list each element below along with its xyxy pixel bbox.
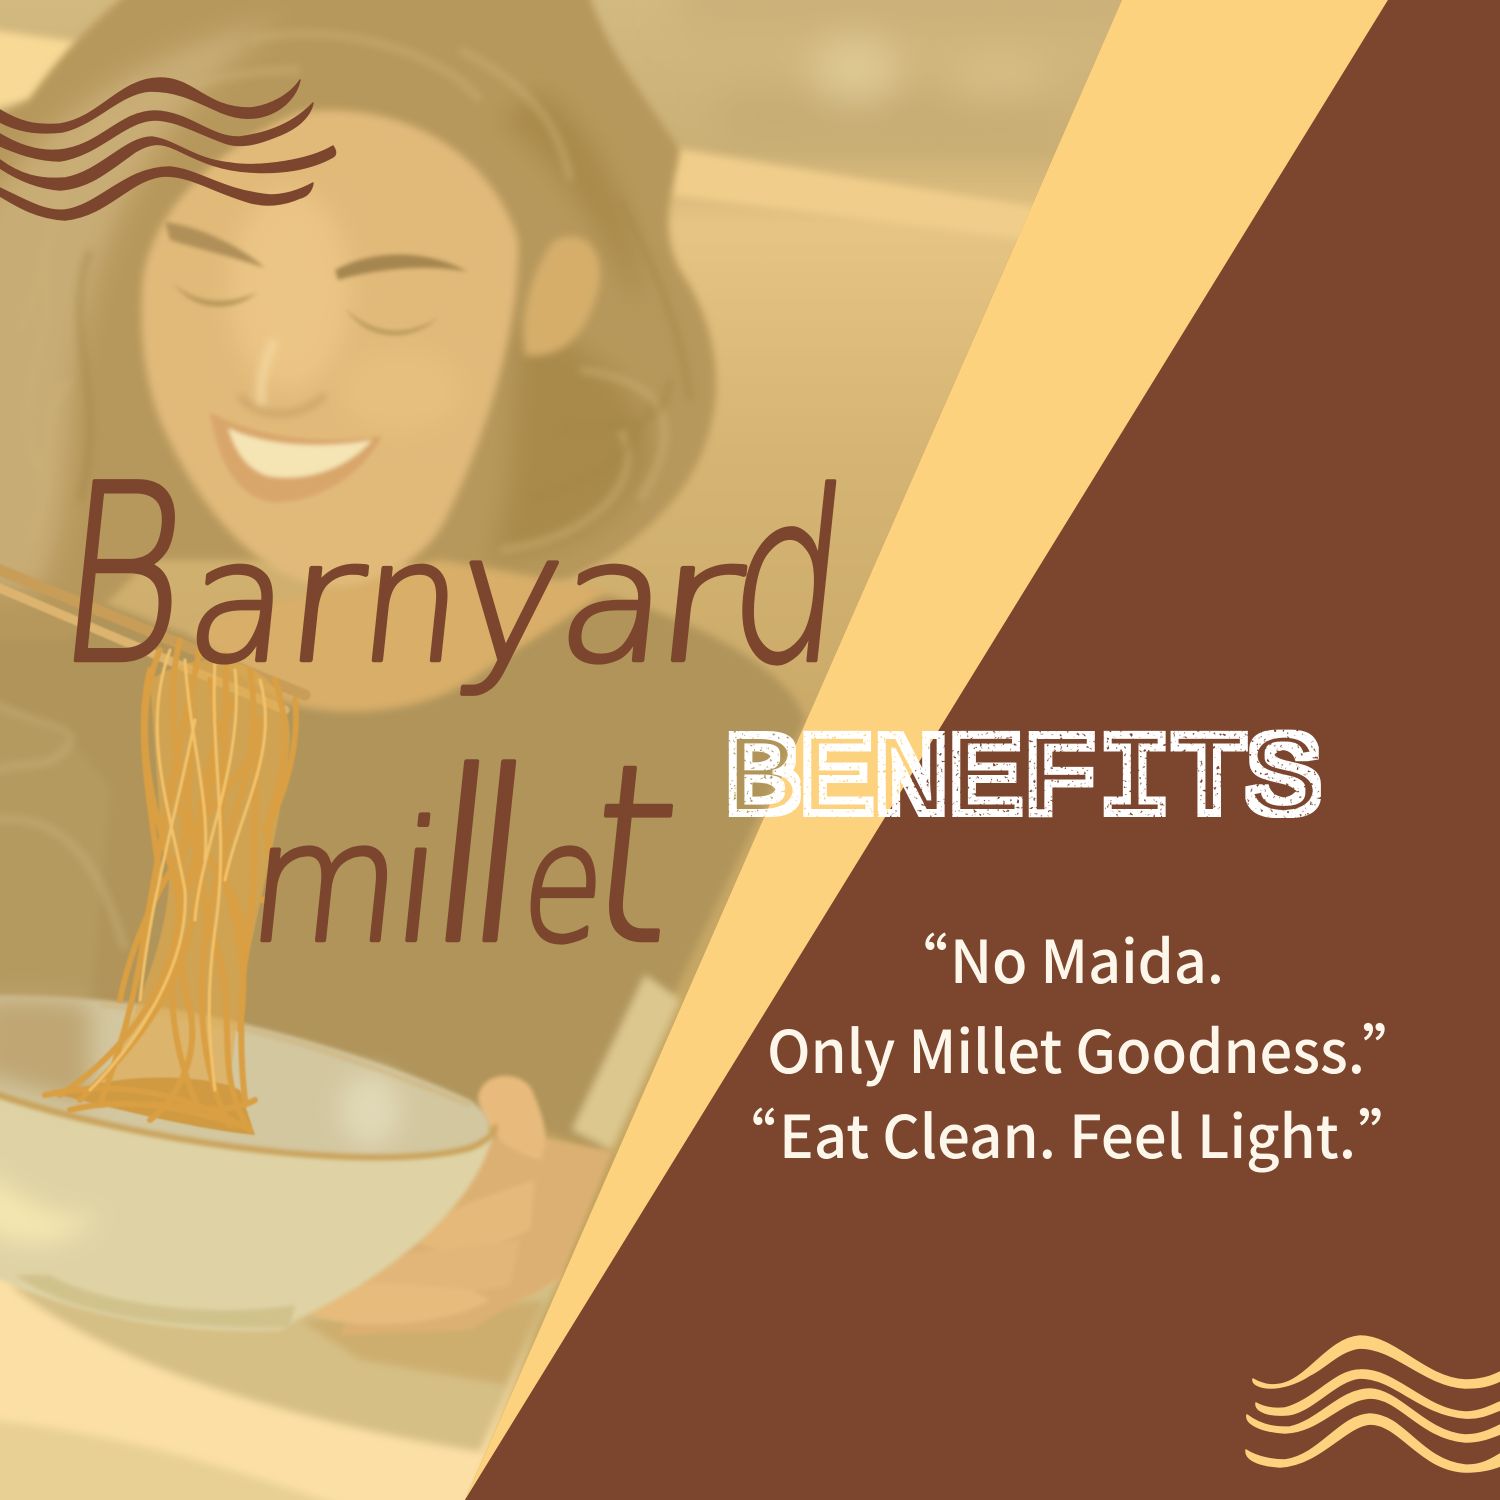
tagline text: No Maida. xyxy=(950,915,1224,1000)
hand holding bowl xyxy=(292,1076,612,1335)
title: Barnyard millet: l xyxy=(452,722,546,996)
title: Barnyard millet: a xyxy=(179,504,299,700)
title: Barnyard millet: e xyxy=(514,787,614,980)
title: Barnyard millet: n xyxy=(352,504,472,700)
sweater xyxy=(0,590,805,1150)
facial features xyxy=(165,222,468,502)
title: Barnyard millet: l xyxy=(415,722,509,996)
title: Barnyard millet: B xyxy=(46,433,201,718)
heading: BENEFITS: BENEFITS xyxy=(725,718,1321,845)
diagonal cream band xyxy=(465,0,1388,1500)
bright shelf xyxy=(0,28,1040,240)
hair strands xyxy=(246,32,666,552)
title: Barnyard millet: a xyxy=(550,504,678,700)
title: Barnyard millet: d xyxy=(718,442,859,716)
title: Barnyard millet: m xyxy=(241,787,411,980)
title: Barnyard millet: r xyxy=(277,504,374,700)
title: Barnyard millet: t xyxy=(576,713,691,998)
tagline text xyxy=(717,915,1421,1175)
bowl xyxy=(0,996,494,1331)
tagline text: Eat Clean. Feel Light. xyxy=(779,1090,1356,1175)
table xyxy=(0,1277,561,1500)
title: Barnyard millet xyxy=(46,433,860,998)
tagline text: ” xyxy=(1362,1005,1421,1090)
title: Barnyard millet: r xyxy=(646,504,752,700)
photo: woman eating noodles xyxy=(0,0,1150,1500)
tagline text: Only Millet Goodness. xyxy=(767,1005,1365,1090)
title: Barnyard millet: y xyxy=(447,495,573,703)
face xyxy=(142,110,610,712)
tagline text: “ xyxy=(889,915,948,1000)
background blur spots xyxy=(810,2,1121,105)
tagline text: ” xyxy=(1358,1090,1417,1175)
steam xyxy=(0,700,125,950)
hair xyxy=(0,0,716,640)
icon: bottom-right cream waves xyxy=(1246,1336,1500,1472)
tagline text: “ xyxy=(717,1090,776,1175)
brown panel xyxy=(465,0,1500,1500)
title: Barnyard millet: i xyxy=(385,787,451,980)
icon: top-left brown waves xyxy=(0,78,336,220)
noodles on chopsticks xyxy=(0,566,305,1135)
